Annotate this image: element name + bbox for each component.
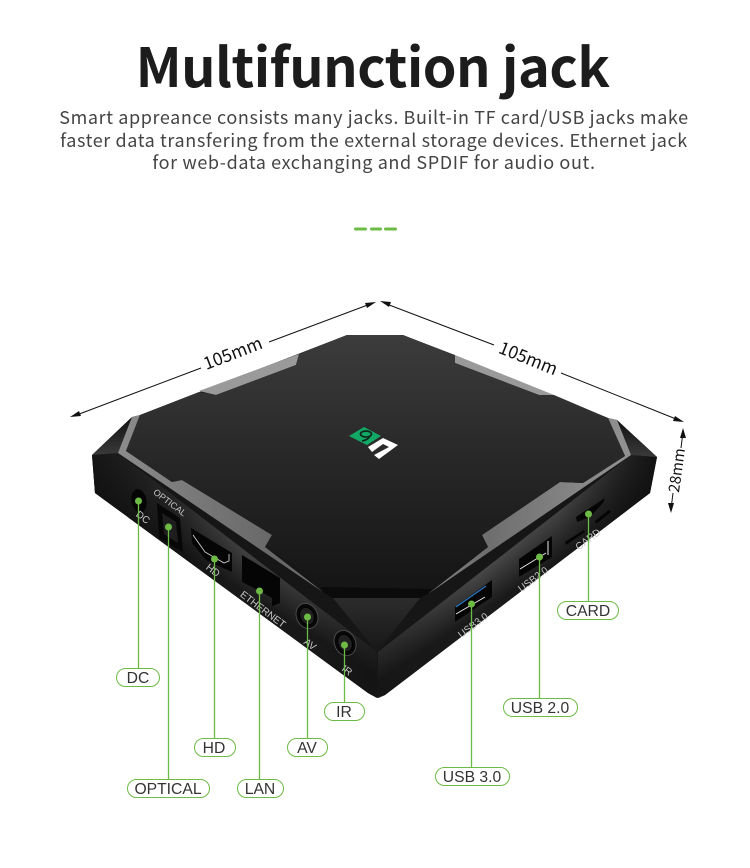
right lip and tab	[428, 418, 631, 594]
printed port names: HD	[203, 562, 222, 580]
callout: DC: DC	[127, 670, 149, 687]
callout: HD: HD	[203, 740, 225, 757]
callout: USB 2.0: USB 2.0	[511, 700, 569, 717]
dimension: height 28mm: 28mm	[663, 447, 690, 494]
description text	[59, 104, 689, 175]
port: HDMI	[191, 528, 232, 572]
callout: CARD	[558, 510, 618, 620]
printed port names	[133, 487, 603, 678]
description text: Smart appreance consists many jacks. Built-in TF card/USB jacks make	[59, 104, 689, 130]
right side face	[378, 455, 657, 698]
callout: IR: IR	[336, 704, 352, 721]
top gray tab right	[455, 355, 554, 395]
port: IR	[330, 627, 360, 659]
port: DC	[130, 488, 148, 514]
left corner facet	[92, 417, 132, 455]
printed port names: ETHERNET	[238, 589, 287, 631]
green dashed divider	[354, 228, 397, 230]
dimension: right 105mm	[380, 301, 684, 422]
callout: IR	[324, 642, 364, 721]
callout: AV	[288, 614, 328, 757]
callout: USB 2.0	[504, 554, 578, 717]
port: optical	[157, 503, 183, 552]
top face	[126, 335, 625, 589]
top gray tab left	[199, 354, 299, 395]
callout: LAN	[238, 588, 284, 798]
callout: USB 3.0	[436, 600, 510, 786]
logo green tag	[349, 427, 381, 445]
left side face	[92, 453, 377, 698]
callout: OPTICAL	[128, 524, 210, 798]
dimension: height 28mm	[663, 428, 690, 513]
title: Multifunction jack	[136, 24, 610, 103]
dimension: right 105mm: 105mm	[495, 335, 562, 381]
left side shading	[92, 453, 377, 698]
device: TV box	[92, 335, 657, 698]
dimension: left 105mm	[70, 302, 376, 417]
port: AV	[292, 600, 322, 632]
right side shading	[378, 455, 657, 698]
printed port names: USB2.0	[516, 565, 551, 595]
port: Ethernet	[242, 555, 280, 606]
callout: AV: AV	[297, 740, 317, 757]
printed port names: OPTICAL	[151, 487, 188, 518]
callout: LAN: LAN	[245, 781, 275, 798]
front dark band	[320, 587, 432, 598]
logo dark nine	[360, 431, 372, 441]
logo white letter	[368, 438, 398, 459]
callout: HD	[194, 556, 236, 757]
front corner bevel	[333, 598, 420, 652]
logo	[349, 427, 398, 459]
port: card slot	[565, 498, 611, 545]
left lip and tab	[118, 415, 323, 592]
description text: faster data transfering from the external storage devices. Ethernet jack	[60, 127, 688, 153]
device silhouette	[92, 335, 657, 698]
printed port names: CARD	[574, 527, 603, 553]
port: USB 3.0	[455, 580, 492, 622]
printed port names: USB3.0	[456, 611, 491, 641]
printed port names: IR	[339, 664, 354, 678]
port: USB 2.0	[519, 536, 552, 577]
right corner facet	[617, 420, 657, 457]
callout: USB 3.0: USB 3.0	[443, 769, 501, 786]
printed port names: AV	[301, 637, 318, 653]
dimension: left 105mm: 105mm	[199, 330, 266, 376]
description text: for web-data exchanging and SPDIF for audio out.	[152, 149, 596, 175]
callout: OPTICAL: OPTICAL	[134, 781, 202, 798]
callout: DC	[116, 498, 160, 687]
callout: CARD: CARD	[566, 603, 610, 620]
printed port names: DC	[133, 509, 152, 527]
